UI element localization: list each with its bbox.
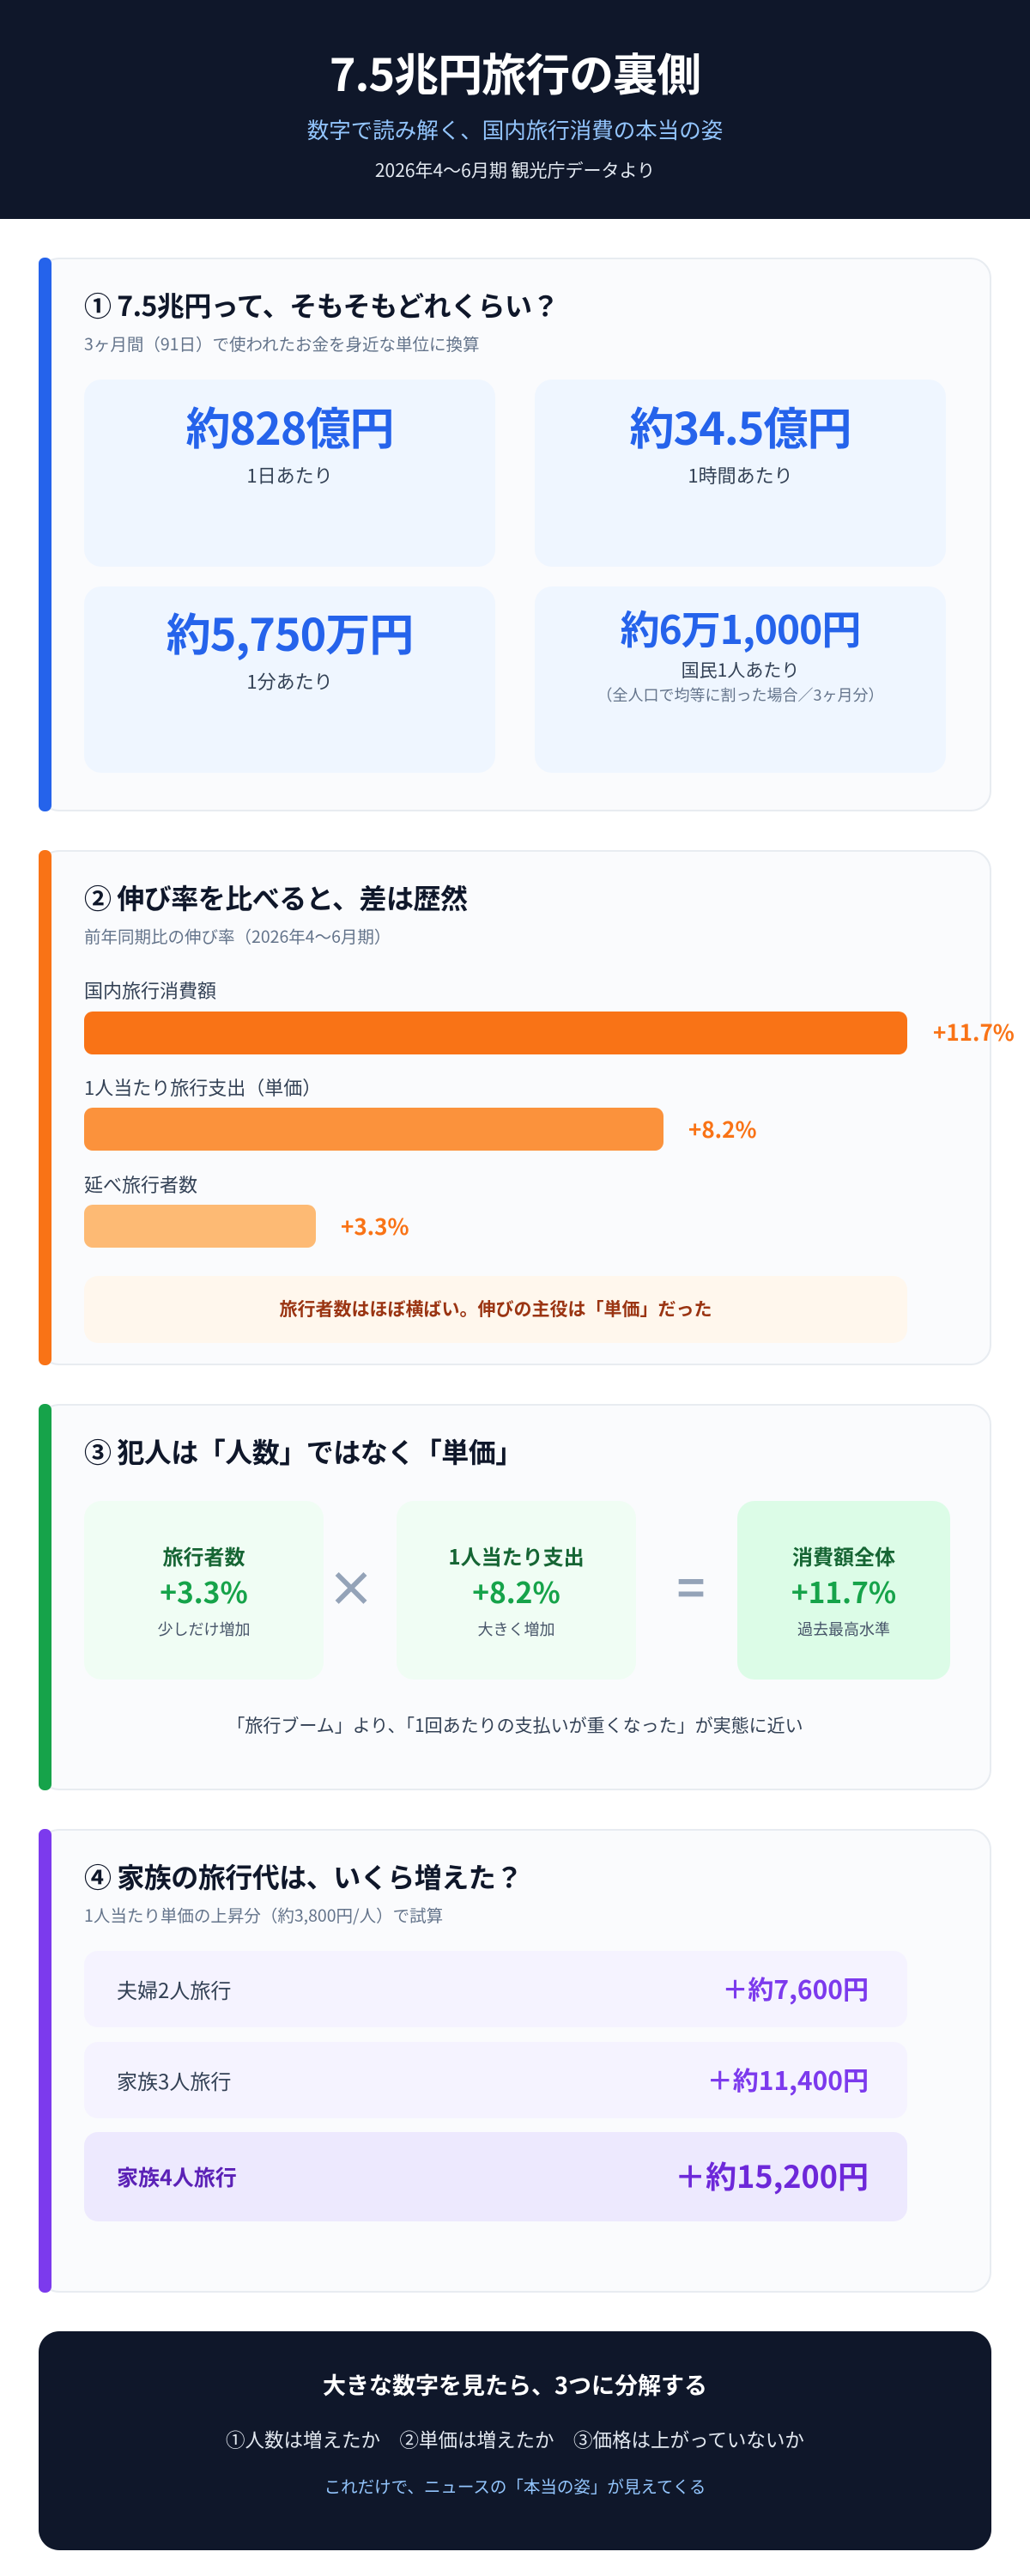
card: per minute: 1分あたり <box>246 667 333 695</box>
panel 1: scale conversion <box>39 258 991 811</box>
value: travellers: +3.3% <box>341 1210 409 1242</box>
callout: growth <box>84 1276 907 1343</box>
subheading 4: 1人当たり単価の上昇分（約3,800円/人）で試算 <box>84 1902 443 1927</box>
operator: equals: = <box>676 1551 706 1620</box>
title: 7.5兆円旅行の裏側 <box>330 39 700 104</box>
value: consumption: +11.7% <box>933 1016 1015 1048</box>
row: family of 4: 家族4人旅行 <box>117 2161 237 2192</box>
card: per person <box>535 586 946 773</box>
card: per person: 国民1人あたり <box>682 657 799 683</box>
footer checklist: ①人数は増えたか ②単価は増えたか ③価格は上がっていないか <box>226 2426 804 2453</box>
row: family of 3 <box>84 2042 907 2118</box>
panel 3: culprit formula <box>39 1404 991 1790</box>
value: unit spend: +8.2% <box>688 1113 757 1145</box>
subtitle: 数字で読み解く、国内旅行消費の本当の姿 <box>307 113 723 145</box>
card: per hour <box>535 380 946 567</box>
bar label: consumption: 国内旅行消費額 <box>84 976 216 1004</box>
card: per hour: 約34.5億円 <box>630 393 851 458</box>
card: travellers: 少しだけ増加 <box>158 1618 251 1640</box>
card: per person: （全人口で均等に割った場合／3ヶ月分） <box>597 683 884 706</box>
header banner <box>0 0 1030 219</box>
callout: growth: 旅行者数はほぼ横ばい。伸びの主役は「単価」だった <box>280 1296 712 1321</box>
panel 4: family cost <box>39 1829 991 2293</box>
source note: 2026年4〜6月期 観光庁データより <box>375 157 655 183</box>
footer note: これだけで、ニュースの「本当の姿」が見えてくる <box>324 2473 706 2498</box>
row: couple: ＋約7,600円 <box>722 1969 869 2007</box>
card: per minute: 約5,750万円 <box>167 599 413 664</box>
bar: unit spend <box>84 1108 663 1151</box>
card: unit spend: 大きく増加 <box>477 1618 554 1640</box>
card: unit spend: 1人当たり支出 <box>448 1540 585 1571</box>
card: travellers: +3.3% <box>160 1570 248 1612</box>
card: per hour: 1時間あたり <box>688 461 793 489</box>
card: per person: 約6万1,000円 <box>621 599 860 656</box>
card: total: 消費額全体 <box>792 1540 895 1571</box>
row: couple <box>84 1951 907 2027</box>
card: total <box>737 1501 950 1680</box>
heading 3: ③ 犯人は「人数」ではなく「単価」 <box>84 1431 523 1471</box>
footer heading: 大きな数字を見たら、3つに分解する <box>323 2367 707 2401</box>
card: unit spend: +8.2% <box>472 1570 560 1612</box>
panel 2: growth rates <box>39 850 1015 1365</box>
heading 4: ④ 家族の旅行代は、いくら増えた？ <box>84 1856 523 1896</box>
footer takeaway <box>39 2331 991 2550</box>
card: total: +11.7% <box>791 1570 896 1612</box>
card: per minute <box>84 586 495 773</box>
bar label: travellers: 延べ旅行者数 <box>84 1170 197 1198</box>
subheading 2: 前年同期比の伸び率（2026年4〜6月期） <box>84 923 391 948</box>
row: family of 4: ＋約15,200円 <box>675 2153 869 2197</box>
heading 1: ① 7.5兆円って、そもそもどれくらい？ <box>84 285 559 325</box>
operator: times: × <box>327 1552 375 1621</box>
subheading 1: 3ヶ月間（91日）で使われたお金を身近な単位に換算 <box>84 331 479 355</box>
card: travellers: 旅行者数 <box>163 1540 245 1571</box>
card: unit spend <box>397 1501 636 1680</box>
row: family of 4 <box>84 2132 907 2221</box>
row: family of 3: 家族3人旅行 <box>117 2065 231 2095</box>
bar: travellers <box>84 1205 316 1248</box>
row: family of 3: ＋約11,400円 <box>707 2060 869 2098</box>
card: travellers <box>84 1501 324 1680</box>
card: per day: 1日あたり <box>246 461 333 489</box>
conclusion text: 「旅行ブーム」より、「1回あたりの支払いが重くなった」が実態に近い <box>227 1712 803 1738</box>
heading 2: ② 伸び率を比べると、差は歴然 <box>84 878 467 917</box>
bar: consumption <box>84 1012 907 1054</box>
bar label: unit spend: 1人当たり旅行支出（単価） <box>84 1073 321 1101</box>
card: total: 過去最高水準 <box>797 1618 890 1640</box>
bar chart: growth <box>84 976 1015 1248</box>
row: couple: 夫婦2人旅行 <box>117 1974 231 2004</box>
card: per day: 約828億円 <box>185 393 394 458</box>
card: per day <box>84 380 495 567</box>
